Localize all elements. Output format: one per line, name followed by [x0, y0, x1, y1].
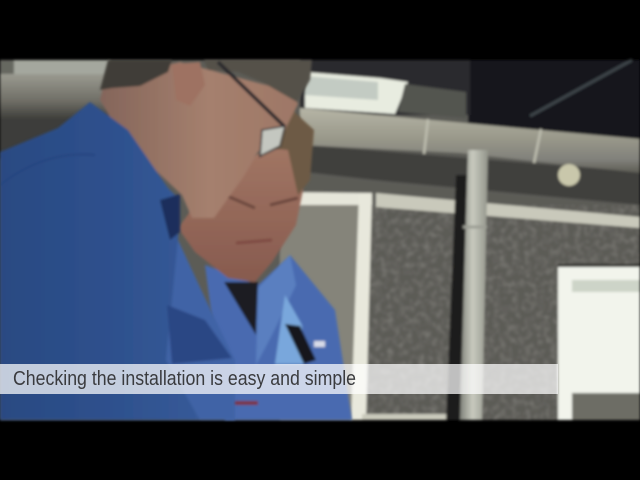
left gutter	[0, 74, 110, 119]
roof light structure	[300, 60, 470, 118]
wall	[0, 60, 640, 420]
rear man hair	[268, 108, 314, 195]
eyeglasses	[218, 62, 285, 156]
roof diagonal beam	[530, 60, 632, 116]
pen in pocket	[232, 401, 258, 405]
black t-shirt	[224, 282, 258, 335]
dark sky and roof upper right	[468, 60, 640, 145]
photo: building background	[0, 60, 640, 420]
wall lamp	[558, 164, 580, 186]
rear man face	[178, 145, 305, 282]
strap	[275, 295, 304, 364]
rear man forehead shadow	[225, 195, 298, 208]
main gutter	[300, 108, 640, 173]
caption text: Checking the installation is easy and simple	[13, 368, 356, 390]
front man	[0, 60, 312, 420]
banner background	[0, 364, 558, 394]
left wall band	[0, 119, 110, 159]
centre window frame top	[280, 192, 372, 205]
rear man overalls	[205, 255, 352, 420]
front man hair right	[204, 60, 312, 102]
front man neck and face	[100, 62, 298, 218]
gutter joints	[424, 119, 541, 163]
upper left roof strip	[0, 60, 110, 76]
sleeve shoulder seam	[0, 154, 95, 185]
rear man	[178, 108, 352, 420]
collar shadow	[160, 194, 180, 240]
centre window frame right	[351, 193, 372, 420]
window stripe	[376, 193, 640, 228]
front man sleeve	[0, 102, 200, 420]
front man ear	[172, 62, 205, 106]
right window	[558, 266, 640, 420]
wall texture	[300, 205, 640, 420]
mouth	[236, 240, 272, 243]
caption banner	[0, 364, 558, 394]
strap buckle	[285, 324, 316, 364]
logo patch	[314, 341, 325, 347]
dark wall band below gutter	[305, 145, 640, 205]
pipe joint	[463, 226, 487, 228]
downpipe	[460, 150, 488, 420]
window sill	[362, 414, 462, 420]
pipe shadow	[446, 175, 468, 420]
pocket flap	[167, 305, 232, 364]
front man shirt front	[138, 240, 235, 420]
centre window glass	[280, 205, 360, 420]
collar	[256, 255, 296, 365]
front man hair left	[100, 60, 172, 90]
